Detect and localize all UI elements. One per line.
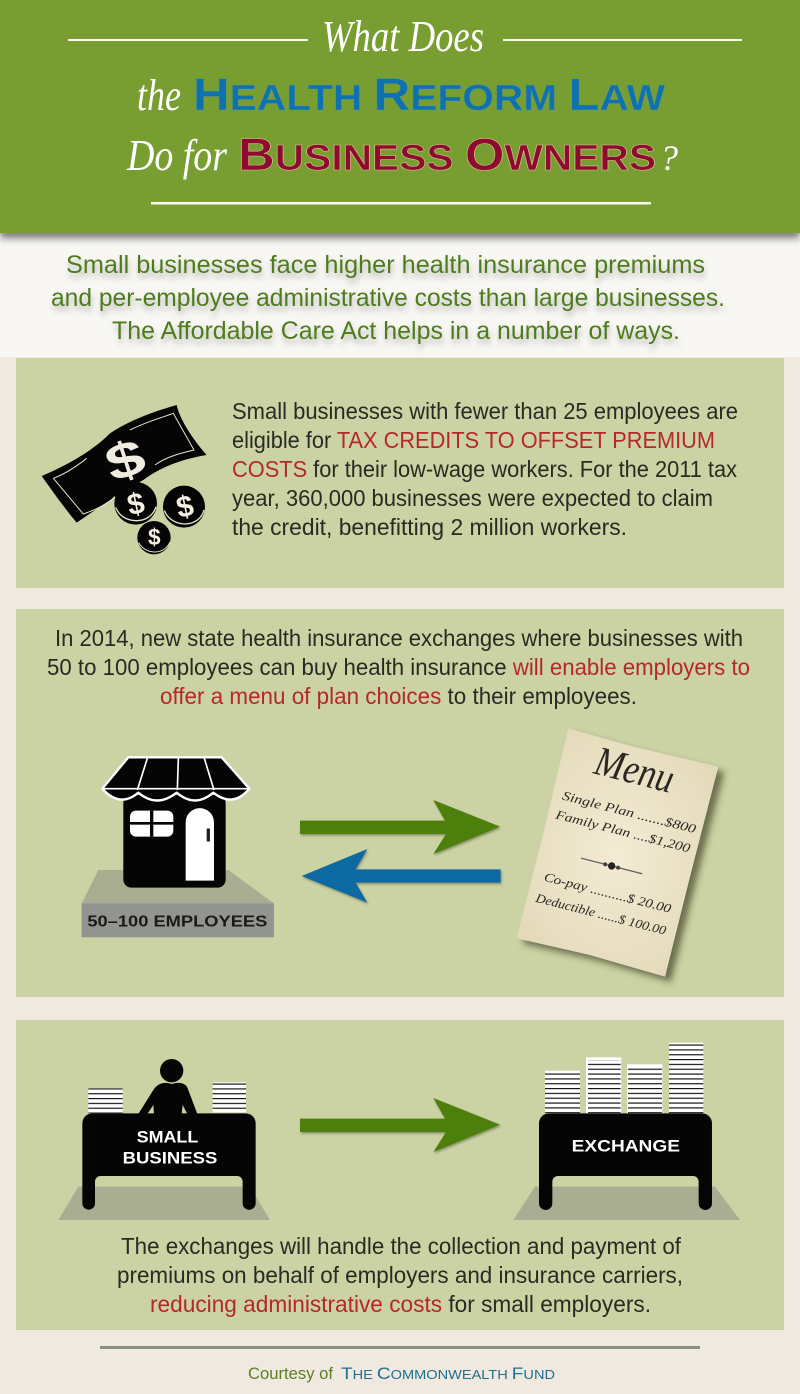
footer: the commonwealth fund: THE COMMONWEALTH FUND xyxy=(341,1364,555,1383)
icon: small business desk: SMALL xyxy=(137,1127,198,1146)
title: line two lead-in: the xyxy=(137,71,181,120)
menu line: family plan: Family Plan ....$1,200 xyxy=(553,807,693,856)
menu line: co-pay: Co-pay ..........$ 20.00 xyxy=(543,870,673,916)
text: administrative explanation: premiums on behalf of employers and insurance carriers, xyxy=(117,1262,683,1288)
arrow: blue left xyxy=(302,849,501,903)
panel: tax credits xyxy=(16,358,784,588)
menu ornament xyxy=(580,855,643,877)
text: tax credit explanation: year, 360,000 businesses were expected to claim xyxy=(232,485,713,511)
text: exchanges explanation: offer a menu of plan choices to their employees. xyxy=(160,683,637,709)
intro text xyxy=(51,251,725,345)
icon: exchange desk: EXCHANGE xyxy=(572,1137,680,1156)
footer: courtesy of: Courtesy of xyxy=(248,1364,333,1383)
icon: money bill and coins xyxy=(42,405,207,554)
text: exchanges explanation xyxy=(47,625,750,709)
arrow: green right to exchange xyxy=(300,1098,500,1152)
title: line one: What Does xyxy=(322,12,484,61)
text: administrative explanation xyxy=(117,1233,683,1317)
text: exchanges explanation: 50 to 100 employees can buy health insurance will enable employers to xyxy=(47,654,750,680)
menu line: single plan: Single Plan .......$800 xyxy=(561,789,698,836)
icon: storefront on platform: 50–100 EMPLOYEES xyxy=(87,914,268,931)
title: line three lead-in: Do for xyxy=(126,131,228,180)
icon: money bill and coins: $ xyxy=(98,428,152,493)
title: question mark: ? xyxy=(660,138,678,178)
panel: administrative costs xyxy=(16,1020,784,1330)
menu line: deductible: Deductible ......$ 100.00 xyxy=(533,891,668,938)
icon: exchange desk xyxy=(513,1043,740,1220)
icon: small business desk: BUSINESS xyxy=(123,1148,217,1167)
icon: storefront on platform xyxy=(82,757,274,937)
icon: money bill and coins: $ xyxy=(124,487,148,522)
panel: insurance exchanges xyxy=(16,609,784,997)
footer: credit xyxy=(100,1346,700,1383)
text: administrative explanation: The exchanges will handle the collection and payment of xyxy=(121,1233,682,1259)
icon: money bill and coins: $ xyxy=(148,524,161,550)
text: tax credit explanation: COSTS for their low-wage workers. For the 2011 tax xyxy=(232,456,737,482)
text: tax credit explanation: the credit, benefitting 2 million workers. xyxy=(232,514,627,540)
arrow: green right xyxy=(300,800,500,854)
icon: plan menu xyxy=(517,728,718,977)
icon: small business desk xyxy=(58,1059,270,1220)
intro text: Small businesses face higher health insurance premiums xyxy=(66,251,705,279)
text: tax credit explanation xyxy=(232,398,738,540)
menu title: Menu xyxy=(589,738,679,803)
panel: title banner xyxy=(0,0,800,233)
intro text: and per-employee administrative costs than large businesses. xyxy=(51,284,725,312)
text: tax credit explanation: Small businesses with fewer than 25 employees are xyxy=(232,398,738,424)
text: administrative explanation: reducing administrative costs for small employers. xyxy=(150,1291,651,1317)
panel: intro background xyxy=(0,230,800,357)
title: health reform law: HEALTH REFORM LAW xyxy=(193,69,665,120)
text: exchanges explanation: In 2014, new state health insurance exchanges where businesses with xyxy=(55,625,743,651)
icon: money bill and coins: $ xyxy=(173,489,197,525)
intro text: The Affordable Care Act helps in a number of ways. xyxy=(112,317,680,345)
title: business owners: BUSINESS OWNERS xyxy=(238,129,656,180)
text: tax credit explanation: eligible for TAX CREDITS TO OFFSET PREMIUM xyxy=(232,427,715,453)
